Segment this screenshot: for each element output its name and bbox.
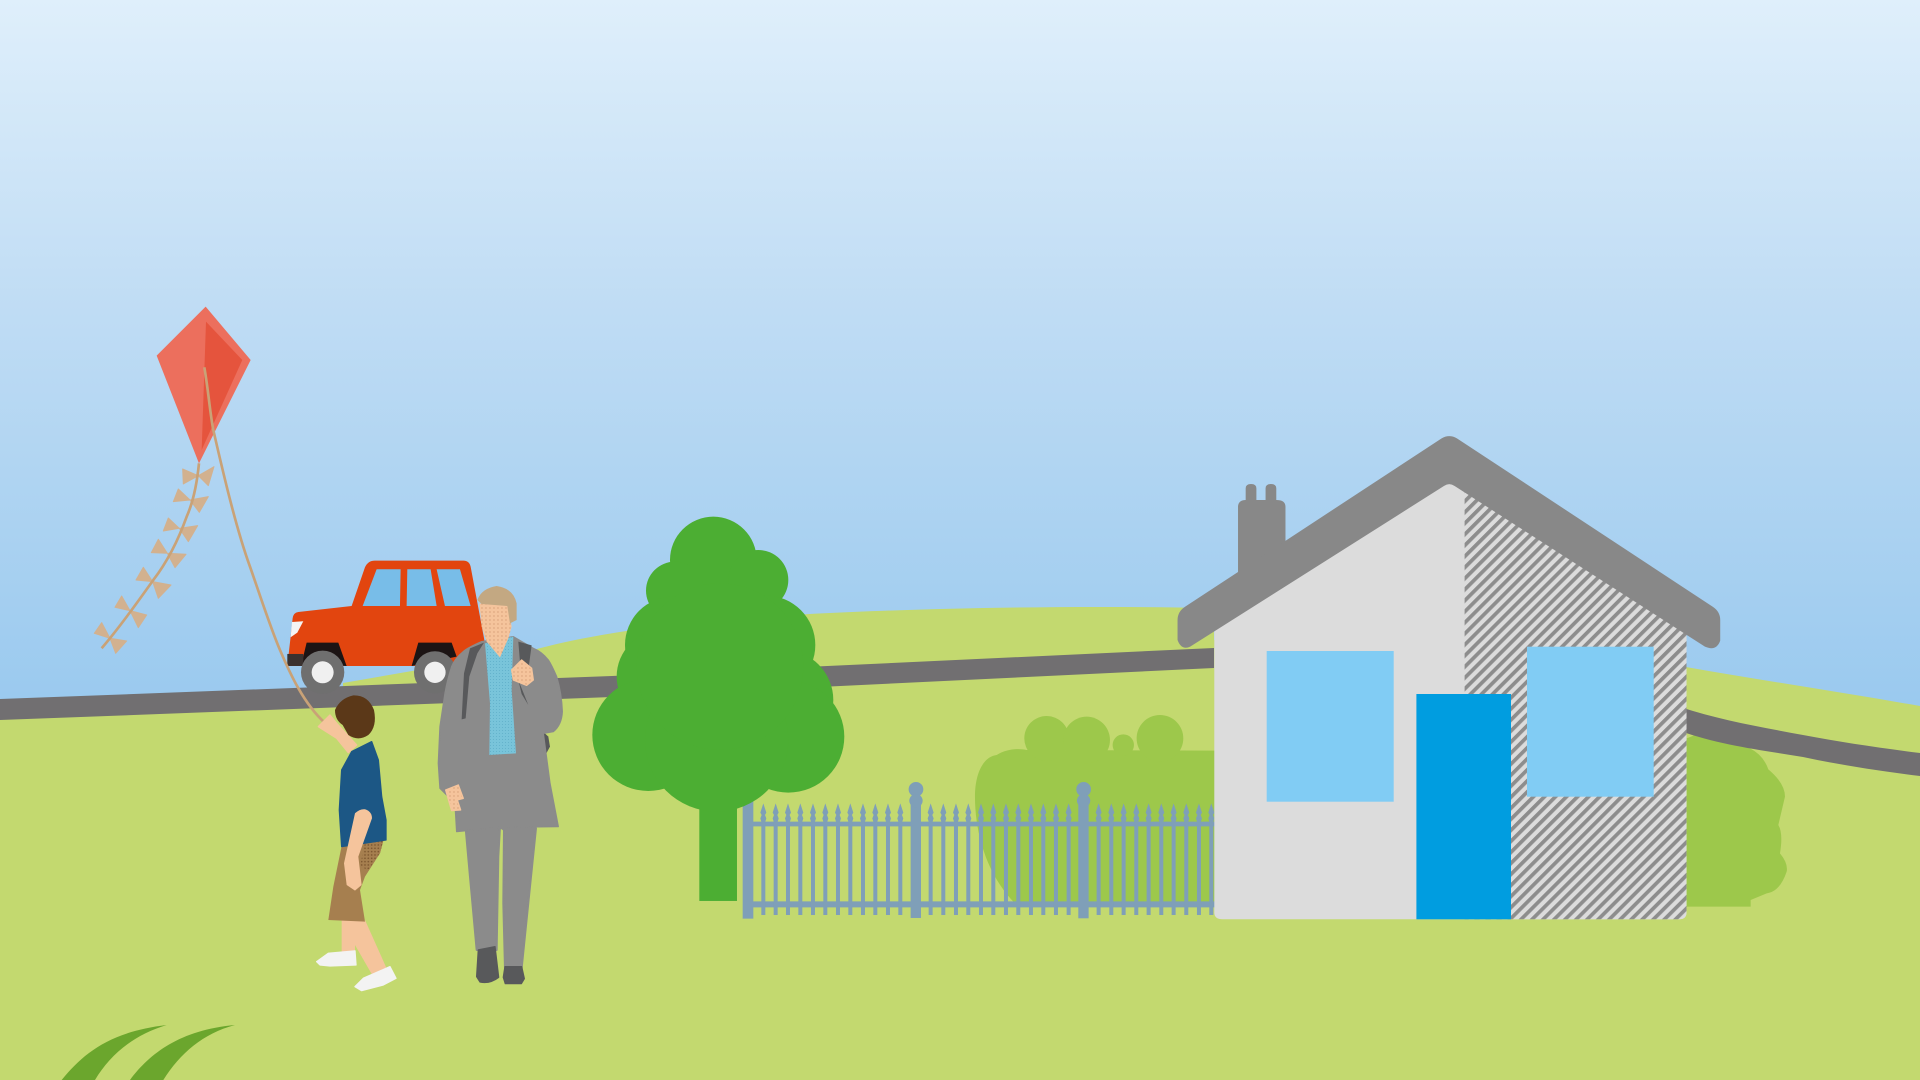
lower hand (446, 785, 463, 811)
fence pickets (760, 803, 1214, 915)
sky (0, 0, 1920, 760)
boy shorts (328, 841, 383, 922)
hand on strap (512, 660, 533, 685)
house (1178, 436, 1720, 919)
boy raised arm (318, 715, 357, 753)
right window (1527, 647, 1654, 797)
front bumper (287, 654, 303, 666)
fence rails (747, 822, 1217, 907)
kite string (204, 367, 325, 723)
wheel arches (302, 643, 457, 666)
backpack straps (462, 642, 532, 719)
red car (287, 561, 485, 694)
shoes (477, 947, 524, 984)
tree (592, 517, 844, 901)
kite tail bows (94, 467, 214, 653)
iron fence (743, 782, 1217, 919)
tree trunk (699, 767, 737, 901)
car body (287, 561, 485, 666)
house wall (1214, 475, 1687, 919)
man with backpack (438, 586, 562, 984)
trousers (466, 827, 536, 968)
road right of house (1680, 707, 1920, 776)
boy flying kite (317, 695, 396, 991)
kite shaded panel (202, 322, 242, 450)
left window (1267, 651, 1394, 802)
boy legs (342, 920, 387, 974)
car windows (363, 569, 471, 606)
neck and face (479, 603, 512, 657)
tree canopy (592, 517, 844, 812)
roof (1178, 436, 1720, 648)
right hedge (1687, 735, 1787, 907)
boy lowered arm (344, 809, 372, 891)
green hills and lawn (0, 607, 1920, 1080)
coat (438, 637, 562, 832)
kite tail line (102, 463, 199, 648)
headlight (291, 621, 303, 637)
shorts shaded part (360, 841, 383, 870)
kite with tail and string (94, 307, 325, 723)
boy hair (335, 695, 375, 738)
left hedge (975, 715, 1217, 902)
chimney (1238, 484, 1285, 577)
fence posts (743, 782, 1091, 919)
kite sail (157, 307, 251, 463)
door (1416, 694, 1511, 919)
boy shoes (317, 951, 396, 991)
scarf (485, 637, 516, 755)
boy shirt (339, 742, 386, 847)
hair (477, 586, 517, 623)
grass blades (62, 1025, 235, 1080)
backpack (541, 729, 550, 754)
wheels (301, 651, 456, 694)
hatched shaded wall (1465, 470, 1686, 919)
road left of house (0, 648, 1214, 720)
